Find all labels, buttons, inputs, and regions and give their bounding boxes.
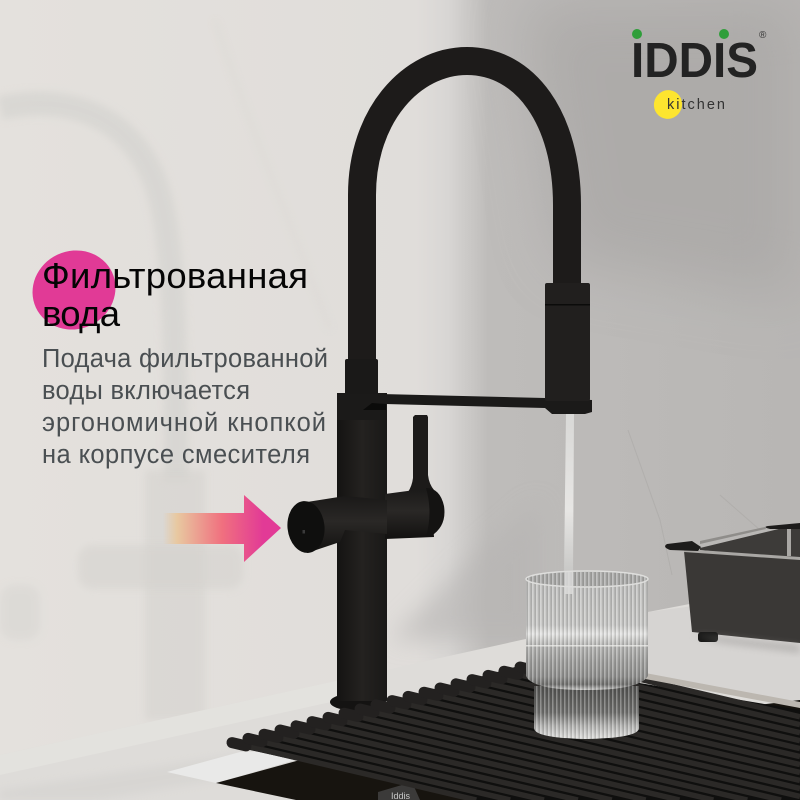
water entering glass [565, 572, 573, 594]
lower collar [345, 359, 378, 395]
glass lower section [534, 686, 639, 739]
heading: вода [42, 293, 121, 334]
sink mat with rods [232, 664, 800, 800]
heading: Фильтрованная [42, 255, 308, 296]
lever handle [408, 415, 434, 492]
faucet [285, 61, 592, 711]
brand plate on sink [378, 782, 420, 800]
water stream [564, 414, 574, 575]
body text: Подача фильтрованной [42, 345, 328, 373]
left mixer cylinder [307, 496, 387, 553]
logo wordmark: IDDIS [631, 34, 758, 88]
glass rim [526, 571, 648, 587]
arrow pointing to button [163, 495, 281, 562]
glass upper section [526, 578, 648, 690]
filtered water button [285, 499, 327, 555]
right mixer cylinder [385, 488, 434, 539]
sink basin [167, 700, 800, 800]
sink front edge of counter [640, 672, 800, 708]
body text: воды включается [42, 377, 250, 405]
logo: IDDIS kitchen [631, 29, 767, 124]
registered mark: ® [759, 30, 767, 41]
body text: эргономичной кнопкой [42, 409, 326, 437]
drying tray [665, 523, 800, 652]
pull-down arched hose [362, 61, 567, 365]
right end cap [426, 488, 444, 537]
pink accent blob [19, 237, 129, 343]
spray head [545, 283, 590, 401]
kitchen label: kitchen [667, 97, 725, 113]
countertop [0, 592, 800, 800]
body text: на корпусе смесителя [42, 441, 310, 469]
faucet body column [337, 393, 387, 701]
faucet foot [330, 693, 386, 711]
crossbar to spray head [337, 393, 592, 420]
water surface [526, 645, 648, 646]
kitchen yellow blob [649, 85, 687, 124]
ribbed glass of water [526, 571, 648, 739]
logo green dots [632, 29, 729, 39]
